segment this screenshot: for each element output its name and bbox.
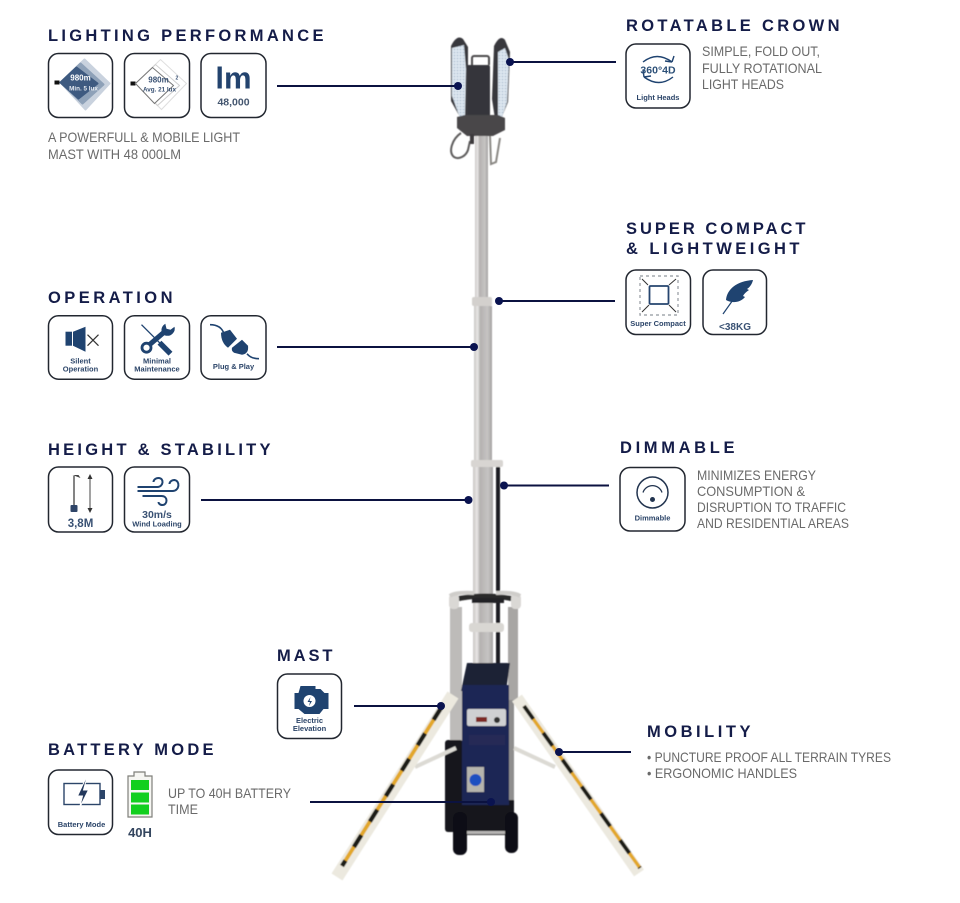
panel: operation (48, 289, 266, 379)
icon: wind loading: 30m/s (142, 509, 172, 521)
description (702, 43, 822, 92)
icon: 360 4D light heads: Light Heads (637, 93, 679, 102)
description (48, 129, 240, 162)
icon: dimmable (620, 468, 685, 531)
icon: 48,000 lumen: lm (215, 60, 252, 96)
icon: 980m avg 21 lux: 980m (148, 76, 169, 84)
icon: 980m avg 21 lux (124, 54, 190, 118)
description: SIMPLE, FOLD OUT, (702, 43, 820, 59)
icon: plug and play (201, 316, 266, 379)
heading: MAST (277, 647, 332, 665)
panel: mobility (647, 723, 891, 781)
icon: minimal maintenance: Maintenance (134, 365, 180, 374)
icon: super compact: Super Compact (630, 319, 686, 328)
description: CONSUMPTION & (697, 483, 806, 499)
icon: 3.8 metre height (48, 467, 112, 532)
control cabinet (445, 663, 514, 835)
right tripod leg (514, 698, 640, 873)
icon: silent operation: Silent (70, 357, 91, 366)
callout lines and dots (201, 58, 631, 806)
icon: wind loading: Wind Loading (132, 520, 182, 528)
icon: 980m avg 21 lux: Avg. 21 lux (143, 86, 177, 94)
icon: feather under 38kg: <38KG (719, 322, 751, 333)
icon: electric elevation: Elevation (293, 724, 327, 733)
icon: plug and play: Plug & Play (213, 362, 255, 371)
heading: MOBILITY (647, 723, 750, 741)
crown light heads (451, 38, 510, 164)
product: light mast (337, 38, 640, 877)
icon: 48,000 lumen (201, 54, 266, 118)
heading: BATTERY MODE (48, 741, 214, 759)
heading: HEIGHT & STABILITY (48, 441, 270, 459)
panel: super compact and lightweight (626, 220, 806, 334)
mast tubes (469, 135, 504, 664)
heading: LIGHTING PERFORMANCE (48, 27, 324, 45)
icon: silent operation (48, 316, 112, 379)
panel: height and stability (48, 441, 270, 532)
icon: electric elevation: Electric (296, 716, 323, 725)
description: UP TO 40H BATTERY (168, 785, 292, 801)
panel: rotatable crown (626, 17, 840, 108)
icon: wind loading (124, 467, 190, 532)
icon: dimmable: Dimmable (635, 514, 670, 522)
heading: OPERATION (48, 289, 172, 307)
icon: green battery 40H: 40H (128, 825, 152, 840)
icon: 980m min 5 lux: Min. 5 lux (69, 86, 98, 92)
icon: 980m avg 21 lux: 2 (176, 76, 178, 82)
description: LIGHT HEADS (702, 76, 784, 92)
description (168, 785, 292, 817)
icon: electric elevation (278, 674, 342, 738)
description: • PUNCTURE PROOF ALL TERRAIN TYRES (647, 749, 891, 765)
icon: 980m min 5 lux (48, 54, 112, 118)
description: AND RESIDENTIAL AREAS (697, 515, 849, 531)
left tripod leg (337, 695, 456, 877)
icon: 360 4D light heads (626, 44, 690, 108)
icon: battery mode (48, 770, 112, 834)
wheels (453, 812, 518, 855)
heading: SUPER COMPACT (626, 220, 806, 238)
icon: 980m min 5 lux: 980m (70, 74, 91, 82)
description: DISRUPTION TO TRAFFIC (697, 499, 846, 515)
description: • ERGONOMIC HANDLES (647, 765, 797, 781)
heading: DIMMABLE (620, 439, 734, 457)
description (647, 749, 891, 781)
icon: silent operation: Operation (63, 365, 99, 374)
icon: 48,000 lumen: 48,000 (217, 96, 250, 108)
panel: battery mode (48, 741, 292, 840)
icon: green battery 40H (128, 772, 152, 840)
panel: mast (277, 647, 342, 738)
icon: 360 4D light heads: 360°4D (640, 64, 676, 76)
description: MINIMIZES ENERGY (697, 467, 817, 483)
heading (626, 220, 806, 258)
description: A POWERFULL & MOBILE LIGHT (48, 129, 240, 145)
icon: minimal maintenance (124, 316, 190, 379)
description: MAST WITH 48 000LM (48, 146, 181, 162)
icon: super compact (626, 270, 690, 334)
description (697, 467, 849, 531)
panel: lighting performance (48, 27, 324, 162)
panel: dimmable (620, 439, 849, 531)
heading: & LIGHTWEIGHT (626, 240, 800, 258)
icon: 3.8 metre height: 3,8M (68, 518, 93, 530)
description: TIME (168, 801, 198, 817)
description: FULLY ROTATIONAL (702, 60, 822, 76)
base ring and uprights (449, 593, 521, 806)
icon: battery mode: Battery Mode (58, 820, 105, 829)
icon: feather under 38kg (703, 270, 766, 334)
heading: ROTATABLE CROWN (626, 17, 840, 35)
icon: minimal maintenance: Minimal (143, 357, 171, 366)
